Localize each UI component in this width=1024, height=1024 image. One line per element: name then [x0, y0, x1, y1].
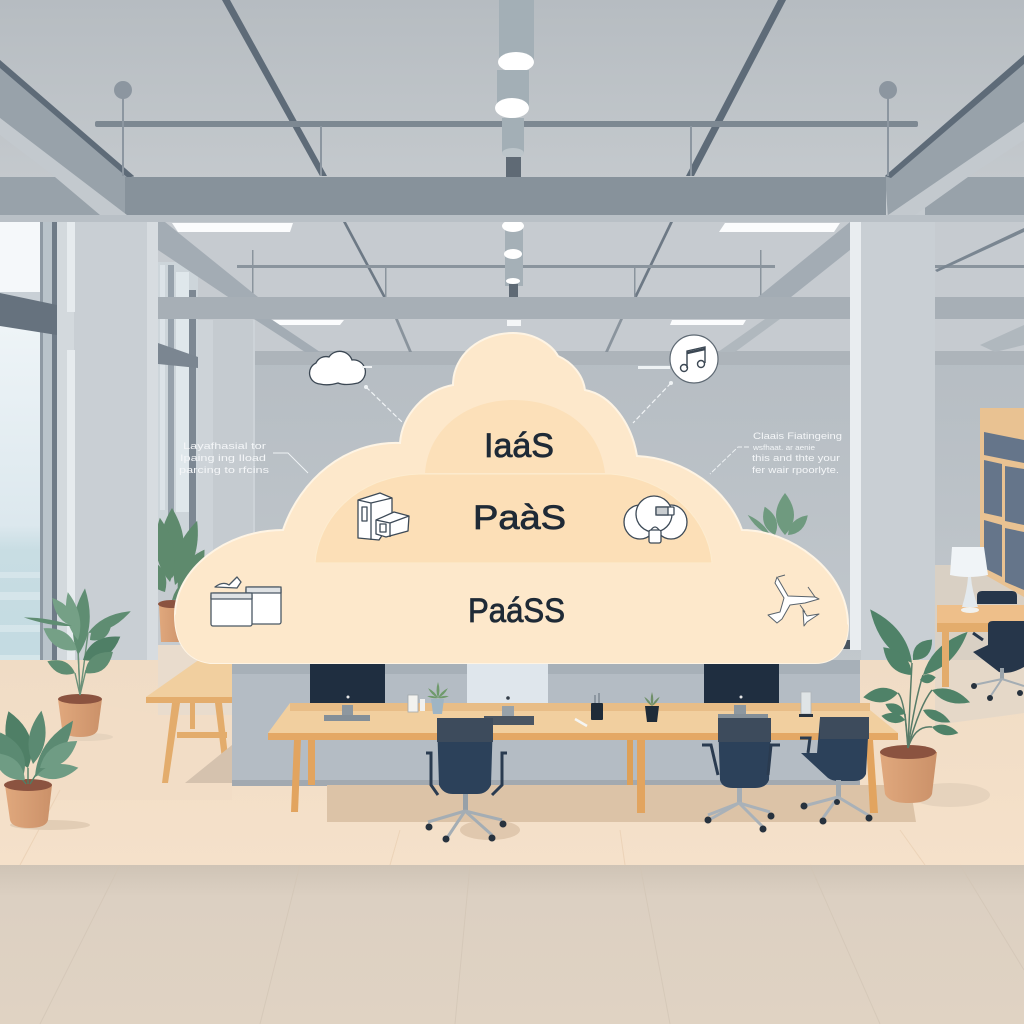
plant behind column: [158, 508, 204, 642]
cloud outer shape: [175, 333, 848, 663]
callout: left text: parcing to rfcins: [179, 465, 269, 476]
columns: [57, 222, 935, 750]
right bookshelf: [980, 408, 1024, 597]
label: top tier: IaáS: [484, 427, 554, 465]
desk accessories: [408, 682, 813, 726]
layer: bottom tier: [175, 563, 848, 663]
upper ceiling: [0, 0, 1024, 218]
label: bottom tier: PaáSS: [468, 592, 565, 630]
callout: right text: Claais Fiatingeing: [753, 431, 842, 442]
chair 2: [702, 718, 780, 832]
inner windows: [158, 262, 255, 560]
callout: left text: Layafhasial tor: [183, 441, 266, 452]
monitors: [310, 663, 779, 706]
icon: server boxes: [358, 493, 409, 540]
connector: cloud icon: [364, 385, 402, 422]
connector: left callout: [273, 453, 308, 473]
plant behind cloud: [746, 493, 812, 539]
desk shadow on floor: [327, 785, 916, 822]
connector: right callout: [710, 447, 749, 474]
plant foreground left: [0, 707, 90, 830]
callout: right text: this and thte your: [752, 453, 840, 464]
label: middle tier: PaàS: [473, 499, 566, 537]
left bench table: [146, 659, 232, 783]
icon: folders: [211, 577, 281, 626]
monitor stands: [324, 705, 768, 725]
right desk, lamp and chairs: [937, 547, 1024, 701]
callout: right text: fer wair rpoorlyte.: [752, 465, 839, 476]
floating icon: music note: [638, 335, 718, 383]
chair 1: [426, 718, 520, 842]
plant near window: [23, 588, 133, 741]
lower ceiling: [0, 218, 1024, 368]
diagonal and middle ceiling beams: [158, 222, 1024, 352]
pendant lights: [495, 0, 534, 179]
layer: top tier: [425, 400, 605, 473]
cloud diagram: [175, 333, 850, 663]
icon: drone: [768, 575, 819, 626]
callout: right text: wsfhaat. ar aenie: [752, 443, 815, 452]
connector: music icon: [633, 381, 673, 423]
left window: [0, 222, 75, 745]
icon: cloud with lock: [624, 496, 687, 543]
floating icon: cloud: [310, 351, 372, 385]
long desk: [268, 703, 898, 813]
callout: left text: Ipaing ing Iload: [180, 453, 266, 464]
floor: [0, 645, 1024, 1024]
partition wall: [232, 660, 860, 786]
plant foreground right: [862, 604, 990, 807]
chair 3: [800, 717, 872, 824]
office chairs: [426, 717, 872, 842]
callout: right text: [752, 431, 842, 476]
main ceiling beam: [0, 118, 1024, 222]
back wall: [200, 351, 1024, 680]
callout: left text: [179, 441, 269, 476]
layer: middle tier: [315, 474, 712, 563]
